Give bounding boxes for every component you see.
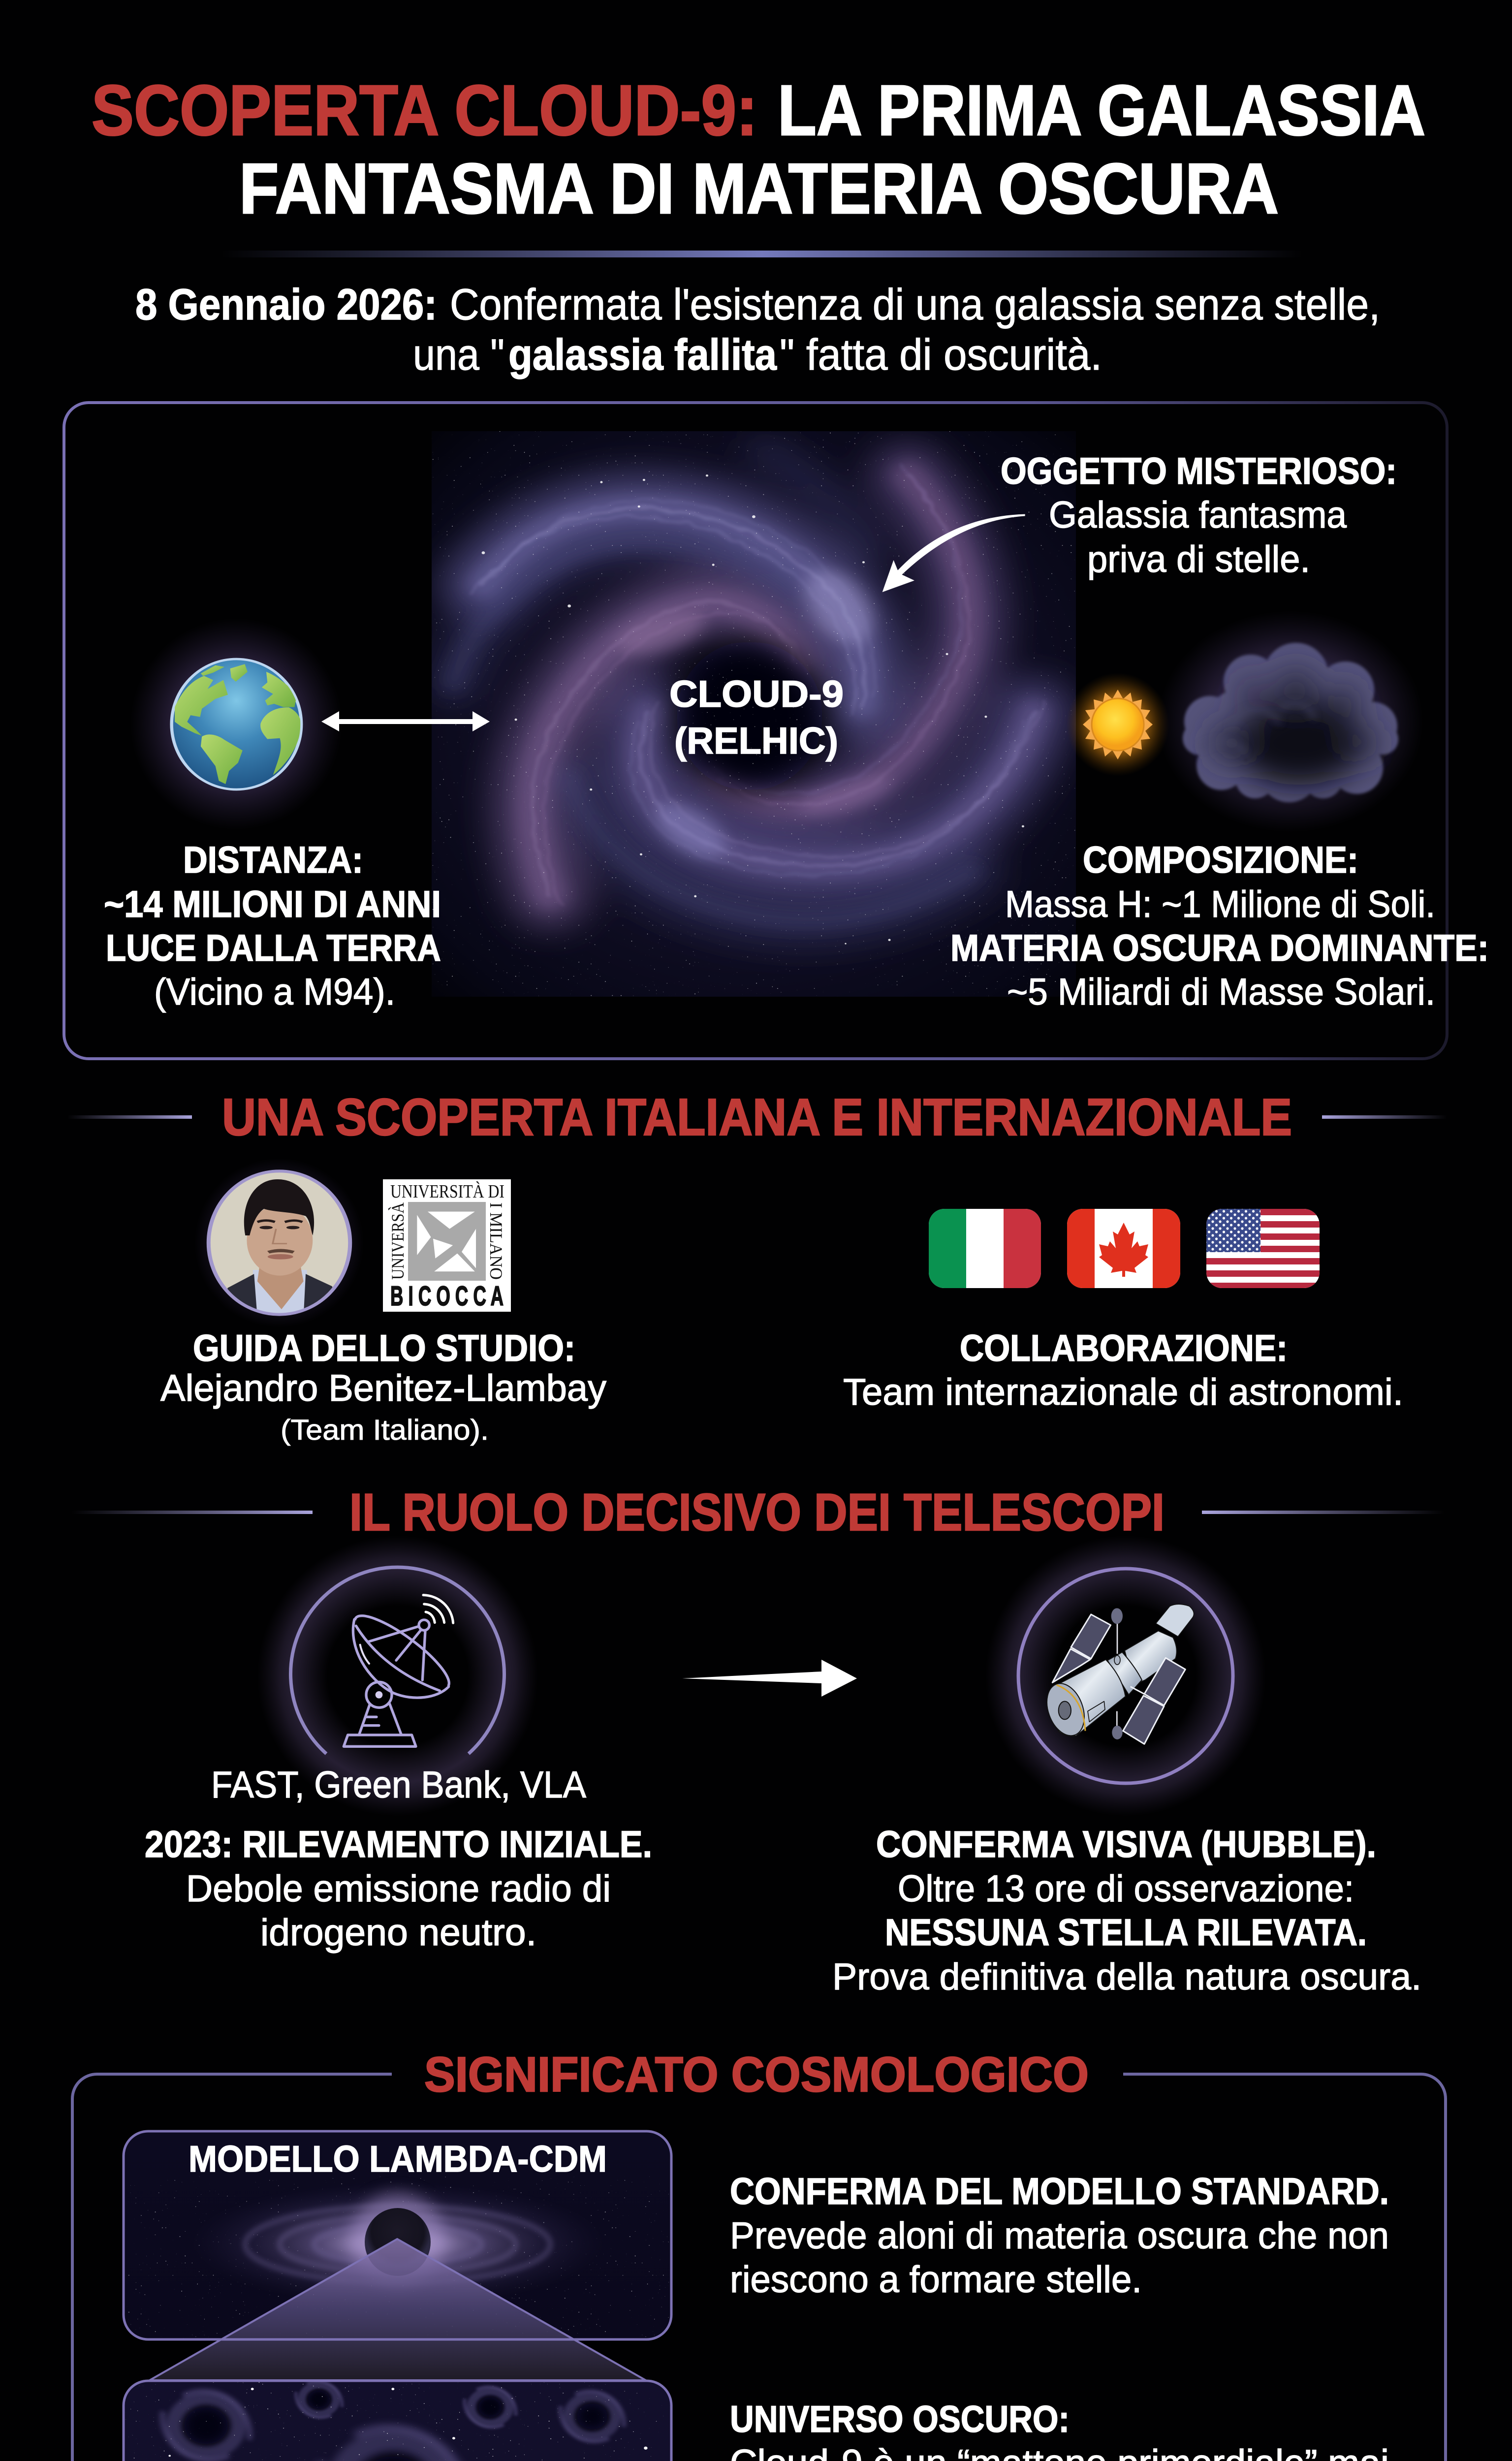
subtitle: " fatta di oscurità. (780, 330, 1102, 379)
text: distanza: ~14 MILIONI DI ANNI (104, 883, 441, 925)
icon: flag of USA (1206, 1209, 1320, 1288)
subtitle: galassia fallita (508, 330, 777, 379)
text: distanza: DISTANZA: (183, 839, 363, 881)
icon: radio telescope (257, 1536, 538, 1816)
text: rilevamento iniziale: Debole emissione radio di (186, 1868, 611, 1910)
logo: Universita di Milano Bicocca: B I C O C C A (390, 1280, 504, 1311)
title: FANTASMA DI MATERIA OSCURA (239, 149, 1279, 228)
text: guida dello studio: GUIDA DELLO STUDIO: (193, 1327, 575, 1369)
text: telescope names: FAST, Green Bank, VLA (211, 1764, 586, 1806)
galaxy illustration (432, 431, 1076, 997)
label: Cloud-9 (Relhic): CLOUD-9 (669, 673, 844, 715)
section heading: Il ruolo decisivo dei telescopi (72, 1483, 1444, 1542)
arrow: radio detection to Hubble confirmation (682, 1660, 857, 1697)
text: distanza: LUCE DALLA TERRA (106, 927, 441, 969)
text: collaborazione (843, 1327, 1403, 1413)
arrow: curved pointer to galaxy (882, 514, 1025, 592)
text: distanza (104, 839, 441, 1013)
illustration: dark matter halo scale (124, 2131, 671, 2461)
text: universo oscuro (730, 2398, 1412, 2461)
logo: Universita di Milano Bicocca: UNIVERSÀ (388, 1202, 408, 1280)
text: composizione: COMPOSIZIONE: (1083, 839, 1358, 881)
subtitle: 8 Gennaio 2026: (135, 280, 437, 329)
text: guida dello studio: (Team Italiano). (281, 1414, 489, 1446)
text: guida dello studio: Alejandro Benitez-Llambay (160, 1367, 606, 1409)
subtitle: Confermata l'esistenza di una galassia senza stelle, (450, 280, 1380, 329)
text: conferma visiva: Prova definitiva della natura oscura. (832, 1956, 1421, 1998)
text: conferma visiva (832, 1824, 1421, 1998)
text: collaborazione: COLLABORAZIONE: (960, 1327, 1288, 1369)
icon: sun (1066, 673, 1169, 776)
icon: flag of Canada (1067, 1209, 1180, 1288)
text: conferma visiva: CONFERMA VISIVA (HUBBLE). (876, 1824, 1376, 1865)
title (92, 70, 1425, 228)
text: guida dello studio (160, 1327, 606, 1446)
text: oggetto misterioso (1001, 450, 1397, 580)
title: LA PRIMA GALASSIA (778, 70, 1425, 150)
text: rilevamento iniziale: 2023: RILEVAMENTO INIZIALE. (145, 1824, 652, 1865)
text: conferma del modello standard (730, 2171, 1389, 2301)
text: composizione: Massa H: ~1 Milione di Soli. (1005, 883, 1435, 925)
logo: Universita di Milano Bicocca: I MILANO (486, 1202, 506, 1280)
photo: Alejandro Benitez-Llambay (201, 1165, 357, 1321)
arrow: double-headed distance arrow (321, 711, 490, 731)
icon: flag of Italy (929, 1209, 1041, 1288)
text: oggetto misterioso: Galassia fantasma (1049, 494, 1347, 536)
text: conferma visiva: Oltre 13 ore di osservazione: (898, 1868, 1354, 1910)
title: SCOPERTA CLOUD-9: (92, 70, 757, 150)
logo: Universita di Milano Bicocca: UNIVERSITÀ DI (390, 1181, 504, 1202)
text: rilevamento iniziale (145, 1824, 652, 1954)
section heading: Una scoperta italiana e internazionale: UNA SCOPERTA ITALIANA E INTERNAZIONALE (222, 1088, 1292, 1146)
text: universo oscuro: UNIVERSO OSCURO: (730, 2398, 1070, 2440)
text: rilevamento iniziale: idrogeno neutro. (260, 1912, 536, 1954)
logo: Universita di Milano Bicocca (383, 1179, 511, 1312)
subtitle (135, 280, 1380, 379)
text: conferma visiva: NESSUNA STELLA RILEVATA. (885, 1912, 1367, 1954)
icon: dark cloud (1158, 611, 1423, 832)
panel: overview of Cloud-9 (64, 403, 1489, 1059)
icon: earth (139, 626, 334, 822)
panel: significato cosmologico (72, 2047, 1446, 2461)
section heading: Il ruolo decisivo dei telescopi: IL RUOLO DECISIVO DEI TELESCOPI (349, 1483, 1165, 1542)
text: composizione: ~5 Miliardi di Masse Solari. (1007, 971, 1435, 1013)
text: oggetto misterioso: OGGETTO MISTERIOSO: (1001, 450, 1397, 492)
text: distanza: (Vicino a M94). (154, 971, 395, 1013)
subtitle: una " (413, 330, 504, 379)
text: conferma del modello standard: Prevede aloni di materia oscura che non (730, 2215, 1389, 2257)
text: composizione (950, 839, 1489, 1013)
text: oggetto misterioso: priva di stelle. (1087, 538, 1310, 580)
label: Cloud-9 (Relhic) (669, 673, 844, 762)
label: modello lambda-cdm: MODELLO LAMBDA-CDM (189, 2138, 607, 2179)
text: collaborazione: Team internazionale di astronomi. (843, 1371, 1403, 1413)
label: Cloud-9 (Relhic): (RELHIC) (674, 720, 838, 762)
icon: Hubble telescope (985, 1536, 1266, 1816)
text: conferma del modello standard: CONFERMA DEL MODELLO STANDARD. (730, 2171, 1389, 2212)
text: conferma del modello standard: riescono a formare stelle. (730, 2259, 1142, 2301)
heading: significato cosmologico: SIGNIFICATO COSMOLOGICO (424, 2047, 1089, 2102)
